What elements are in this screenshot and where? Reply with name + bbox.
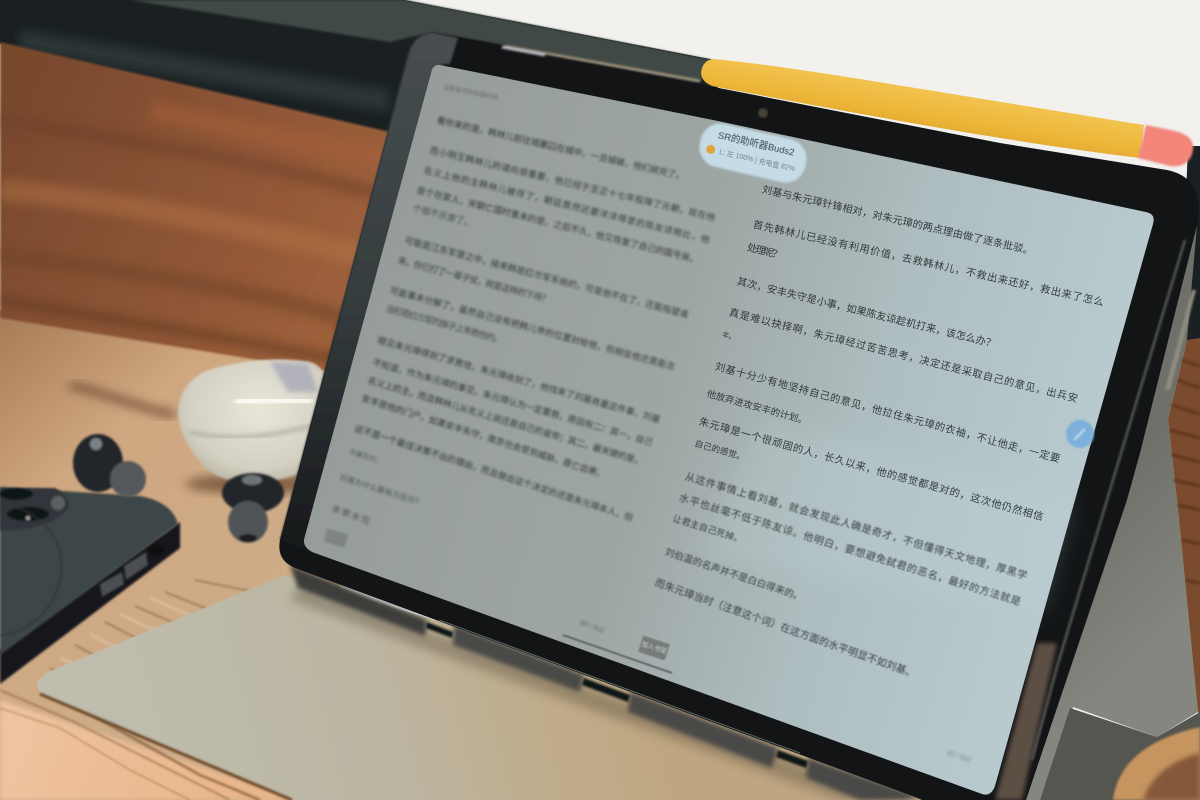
right text column, lower blurred lines: 水平也丝毫不低于陈友谅。他明白，要想避免弑君的恶名，最好的方法就是: [677, 491, 1022, 608]
left text column: [330, 83, 717, 526]
pad shadow edge: [40, 694, 292, 800]
page counter: 80 / 502: [579, 620, 605, 635]
lower floor of cover: [1040, 708, 1200, 800]
earbud notification pill: [695, 119, 811, 187]
left text column: 本章未完: [330, 502, 372, 526]
left text column: 眼见朱元璋得到了求救信，朱元璋收到了，他找来了刘基商量这件事，刘基: [377, 334, 662, 425]
table surface: [0, 310, 340, 800]
left text column: 刘基反对。: [349, 447, 383, 466]
shadow of block on table: [70, 385, 175, 415]
screen: [304, 65, 1154, 795]
pill title: SR的助听器Buds2: [717, 129, 796, 159]
left text column: 可能是江东军营之中，接来韩是红巾军系统的，可是他不在了，还能指望谁: [404, 234, 690, 320]
top bezel highlight strip: [502, 46, 700, 81]
right text column, lower blurred lines: 让君主自己死掉。: [671, 512, 744, 545]
earbud case: [178, 360, 326, 494]
phone camera island: [0, 488, 69, 530]
shadow under tablet: [290, 585, 900, 800]
left text column: 当前章节的标题内容: [442, 83, 499, 102]
screen light bloom: [700, 420, 1070, 610]
left text column: 这不是一个最佳决策不出的理由，而且做出这个决定的还是朱元璋本人，但: [353, 422, 635, 523]
right text column: [694, 183, 1105, 523]
left text column: 看你来的是，韩林儿前往城塞囚在城中，一旦城破，他们就完了。: [436, 114, 686, 182]
right text column: 自己的感觉。: [694, 437, 747, 462]
pill battery icon: [705, 144, 716, 155]
left text column: 而小明王韩林儿的请向很重要，他已经于至正十七年投降了元朝，现在他: [429, 144, 717, 223]
right text column: 处理呢？: [746, 242, 784, 262]
left text column: 名义上的主，而且韩林儿从名义上说还是自己的皇帝；其二，最关键的是，: [367, 374, 645, 467]
screen edge reflection: [995, 643, 1057, 800]
bottom edge bright line: [439, 620, 800, 753]
phone side: [0, 522, 180, 684]
hinge slots: [426, 622, 808, 768]
right wooden block: [1168, 338, 1200, 716]
tablet body: [279, 32, 1199, 800]
right text column: 其次，安丰失守是小事，如果陈友谅趁机打来，该怎么办？: [736, 275, 997, 350]
left text column: 名义上他的主韩林儿被俘了，朝廷竟然还要洋洋得意的陈友谅相比，他: [423, 164, 711, 245]
right text column: 首先韩林儿已经没有利用价值，去救韩林儿，不救出来还好，救出来了怎么: [752, 218, 1105, 309]
hinge bumps on bottom edge: [290, 565, 920, 800]
left text column: 安丰是他的门户，如果安丰失守，南京也会受到威胁，唇亡齿寒。: [360, 392, 607, 480]
right text column, lower blurred lines: 从这件事情上看刘基，就会发现此人确是奇才，不但懂得天文地理，厚黑学: [683, 470, 1029, 582]
left text column: 可能事未分解了，虽然自己没有把韩儿帝的位置封给他，但相信他还是能念: [389, 284, 677, 372]
bottom right page number: 80 / 502: [946, 750, 972, 765]
drawing pad on table: [37, 575, 960, 800]
floating edit button: [1066, 420, 1094, 448]
camera: [758, 108, 768, 118]
left text column: 来，你已打了一辈子仗，就是这样的下场？: [397, 254, 551, 305]
tablet: [279, 32, 1199, 800]
left text column: 个很不乐意了。: [412, 202, 475, 228]
left small button: [323, 528, 349, 548]
phone wireless ring: [0, 503, 62, 636]
right text column, lower blurred lines: 而朱元璋当时（注意这个词）在这方面的水平明显不如刘基。: [653, 576, 918, 680]
right text column: 朱元璋是一个很顽固的人，长久以来，他的感觉都是对的，这次他仍然相信: [698, 415, 1045, 523]
stylus pencil: [701, 59, 1193, 166]
right text column, lower blurred lines: 刘伯温的名声并不是白白得来的。: [663, 546, 804, 603]
pencil yellow body: [701, 59, 1144, 158]
left text column: 当初是红巾军的旗子上来救他的。: [385, 302, 504, 345]
left text column: 是个在家人，宋朝亡国时重未的是，之后不久，他又恢复了自己的国号吴，: [416, 184, 700, 265]
wooden bowl: [1113, 727, 1200, 800]
dark window frame: [0, 0, 720, 135]
left earbuds: [73, 434, 146, 497]
right text column: 他放弃进攻安丰的计划。: [706, 388, 809, 426]
phone buttons and port: [100, 545, 163, 597]
reading progress bar: [563, 635, 672, 673]
phone: [0, 487, 180, 684]
right earbuds: [222, 473, 284, 543]
right text column: 丰。: [721, 330, 737, 342]
left text column: 不知道，作为朱元璋的事见，朱元璋认为一定要救，原因有二：其一，自己: [372, 356, 654, 448]
side frame line: [1032, 240, 1185, 760]
left text column: 刘基为什么要极力反对？: [339, 472, 424, 507]
right text column: 刘基与朱元璋针锋相对，对朱元璋的两点理由做了逐条批驳。: [761, 183, 1035, 257]
dark strip right of the tablet: [1180, 146, 1200, 342]
right text column: 刘基十分少有地坚持自己的意见，他拉住朱元璋的衣袖，不让他走，一定要: [714, 360, 1062, 465]
left bezel: [280, 32, 458, 550]
right text column: 真是难以抉择啊，朱元璋经过苦苦思考，决定还是采取自己的意见，出兵安: [728, 306, 1079, 405]
pencil salmon eraser: [1138, 125, 1193, 166]
phone back surface: [0, 487, 178, 655]
bottom action button: [638, 636, 670, 660]
pill battery text: L: 左 100% | 充电盒 82%: [718, 147, 796, 173]
wooden block behind tablet: [0, 42, 400, 372]
peach foreground of table: [0, 700, 300, 800]
right text column, lower blurred lines: [653, 470, 1029, 680]
stand back cover: [1000, 225, 1198, 800]
table grain stripes: [0, 580, 260, 800]
bottom action button: 加入书架: [641, 639, 669, 656]
